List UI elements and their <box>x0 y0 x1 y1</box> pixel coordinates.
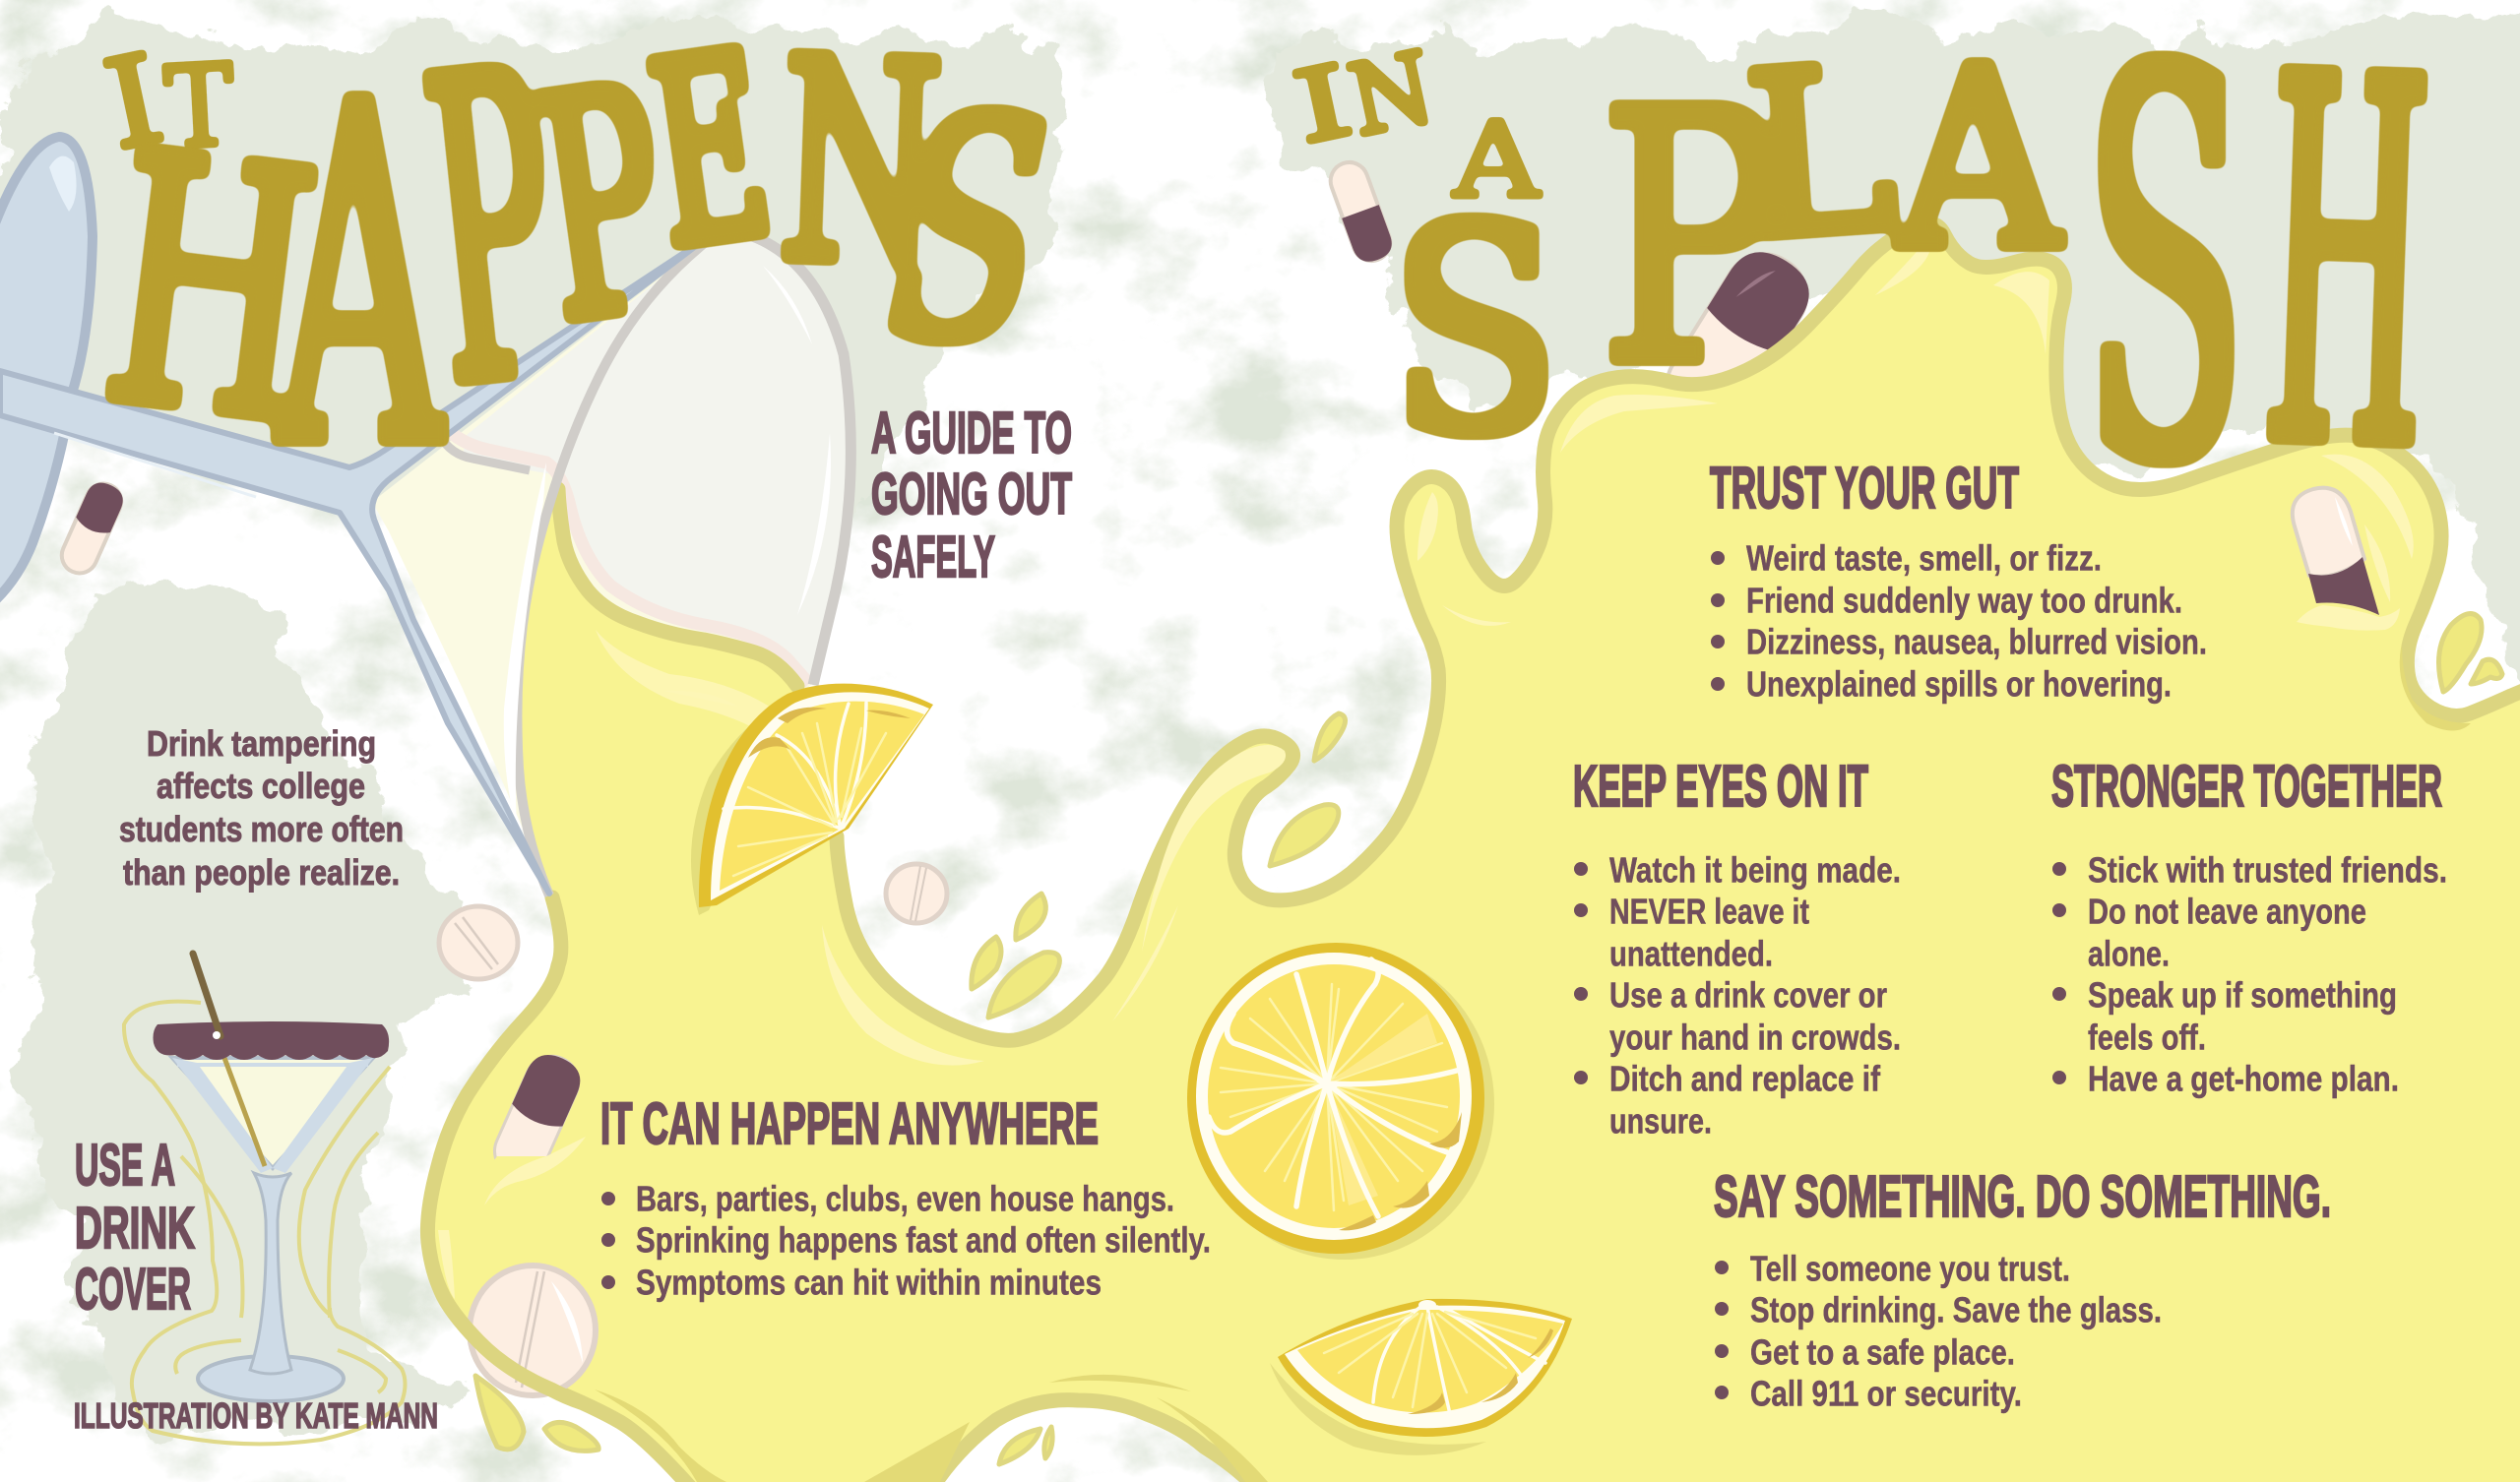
title: Happens: S <box>855 55 1080 409</box>
text block: drink tampering note: Drink tampering <box>147 723 376 764</box>
title: In a <box>1283 30 1542 222</box>
icon: lemon wedge lower <box>1270 1299 1572 1455</box>
panel: it can happen anywhere: IT CAN HAPPEN ANYWHERE <box>600 1091 1099 1156</box>
title: Happens: N <box>776 0 946 330</box>
panel: keep eyes on it: unattended. <box>1609 933 1773 974</box>
panel: say something do something: Get to a safe place. <box>1750 1332 2015 1372</box>
title: Happens: A <box>274 3 444 553</box>
panel: stronger together: Stick with trusted friends. <box>2088 850 2447 890</box>
text block: drink tampering note: students more often <box>119 809 404 849</box>
panel: stronger together: Do not leave anyone <box>2088 892 2366 931</box>
panel: keep eyes on it: unsure. <box>1609 1100 1712 1142</box>
title: Happens <box>89 0 1080 553</box>
panel: trust your gut: Weird taste, smell, or fizz. <box>1746 537 2102 579</box>
icon: round pill center <box>886 864 947 923</box>
icon: capsule upper left <box>55 477 128 580</box>
icon: glass rim and cone <box>0 234 850 895</box>
panel: stronger together: Speak up if something <box>2088 974 2397 1016</box>
heading: use a drink cover <box>75 1133 195 1322</box>
panel: stronger together: Have a get-home plan. <box>2088 1059 2399 1098</box>
icon: tilted glass foot <box>0 137 93 605</box>
panel: keep eyes on it <box>1573 754 1901 1142</box>
heading: a guide to going out safely: SAFELY <box>871 525 995 589</box>
icon: capsule in splash right <box>2293 488 2400 631</box>
title: In a: N <box>1340 30 1443 159</box>
icon: covered martini glass <box>124 954 406 1444</box>
panel: keep eyes on it: your hand in crowds. <box>1609 1018 1901 1057</box>
title: Happens: P <box>522 21 685 394</box>
panel: it can happen anywhere <box>600 1091 1211 1303</box>
title: Happens: H <box>89 78 334 501</box>
icon: large round pill lower left <box>441 1266 596 1402</box>
text block: drink tampering note: than people realize. <box>123 852 400 893</box>
heading: use a drink cover: COVER <box>75 1257 191 1322</box>
panel: tilted glass bowl <box>372 234 850 897</box>
panel: it can happen anywhere: Symptoms can hit within minutes <box>636 1262 1102 1303</box>
panel: keep eyes on it: NEVER leave it <box>1609 892 1809 931</box>
panel: trust your gut: Friend suddenly way too drunk. <box>1746 581 2182 620</box>
panel: keep eyes on it: Ditch and replace if <box>1609 1059 1881 1098</box>
heading: a guide to going out safely: A GUIDE TO <box>871 401 1072 465</box>
icon: splash droplets <box>475 614 2502 1464</box>
heading: use a drink cover: DRINK <box>75 1196 195 1261</box>
title: Splash: A <box>1896 14 2063 306</box>
panel: keep eyes on it: Use a drink cover or <box>1609 974 1887 1016</box>
heading: a guide to going out safely: GOING OUT <box>871 462 1072 526</box>
heading: use a drink cover: USE A <box>75 1133 175 1198</box>
title: Happens: E <box>637 0 785 307</box>
panel: keep eyes on it: KEEP EYES ON IT <box>1573 754 1868 819</box>
title: Splash: P <box>1600 36 1785 443</box>
panel: stronger together <box>2051 754 2447 1098</box>
panel: stronger together: alone. <box>2088 933 2170 974</box>
text block: drink tampering note: affects college <box>157 766 365 806</box>
title: In a: I <box>1283 43 1363 167</box>
icon: capsule near In <box>1324 156 1397 267</box>
icon: capsule in splash lower left <box>482 1047 591 1205</box>
panel: say something do something: Stop drinking. Save the glass. <box>1750 1289 2162 1330</box>
panel: it can happen anywhere: Bars, parties, clubs, even house hangs. <box>636 1179 1174 1218</box>
panel: it can happen anywhere: Sprinking happens fast and often silently. <box>636 1220 1211 1260</box>
icon: large capsule behind splash <box>1651 239 1822 442</box>
panel: trust your gut: Dizziness, nausea, blurred vision. <box>1746 622 2207 661</box>
title: It <box>93 28 237 178</box>
panel: yellow liquid splash <box>427 223 2520 1482</box>
panel: say something do something <box>1714 1164 2331 1413</box>
title: Splash: L <box>1737 16 1904 289</box>
title: In a: A <box>1452 99 1542 222</box>
title: It: T <box>161 39 237 174</box>
text block: illustration credit: ILLUSTRATION BY KATE MANN <box>74 1395 438 1436</box>
panel: say something do something: Call 911 or security. <box>1750 1374 2022 1413</box>
panel: trust your gut: Unexplained spills or hovering. <box>1746 663 2172 705</box>
panel: say something do something: Tell someone you trust. <box>1750 1248 2070 1289</box>
text block: drink tampering note <box>119 723 404 893</box>
panel: stronger together: feels off. <box>2088 1018 2206 1057</box>
heading: a guide to going out safely <box>871 401 1072 589</box>
icon: round lemon slice <box>1187 943 1494 1260</box>
title: It: I <box>93 28 175 178</box>
title: Splash <box>1389 0 2435 582</box>
panel: keep eyes on it: Watch it being made. <box>1609 850 1901 890</box>
icon: round pill left <box>439 906 518 979</box>
panel: trust your gut: TRUST YOUR GUT <box>1710 456 2019 521</box>
panel: trust your gut <box>1710 456 2207 705</box>
icon: lemon wedge at glass <box>691 684 933 915</box>
title: Splash: S <box>1389 166 1561 498</box>
